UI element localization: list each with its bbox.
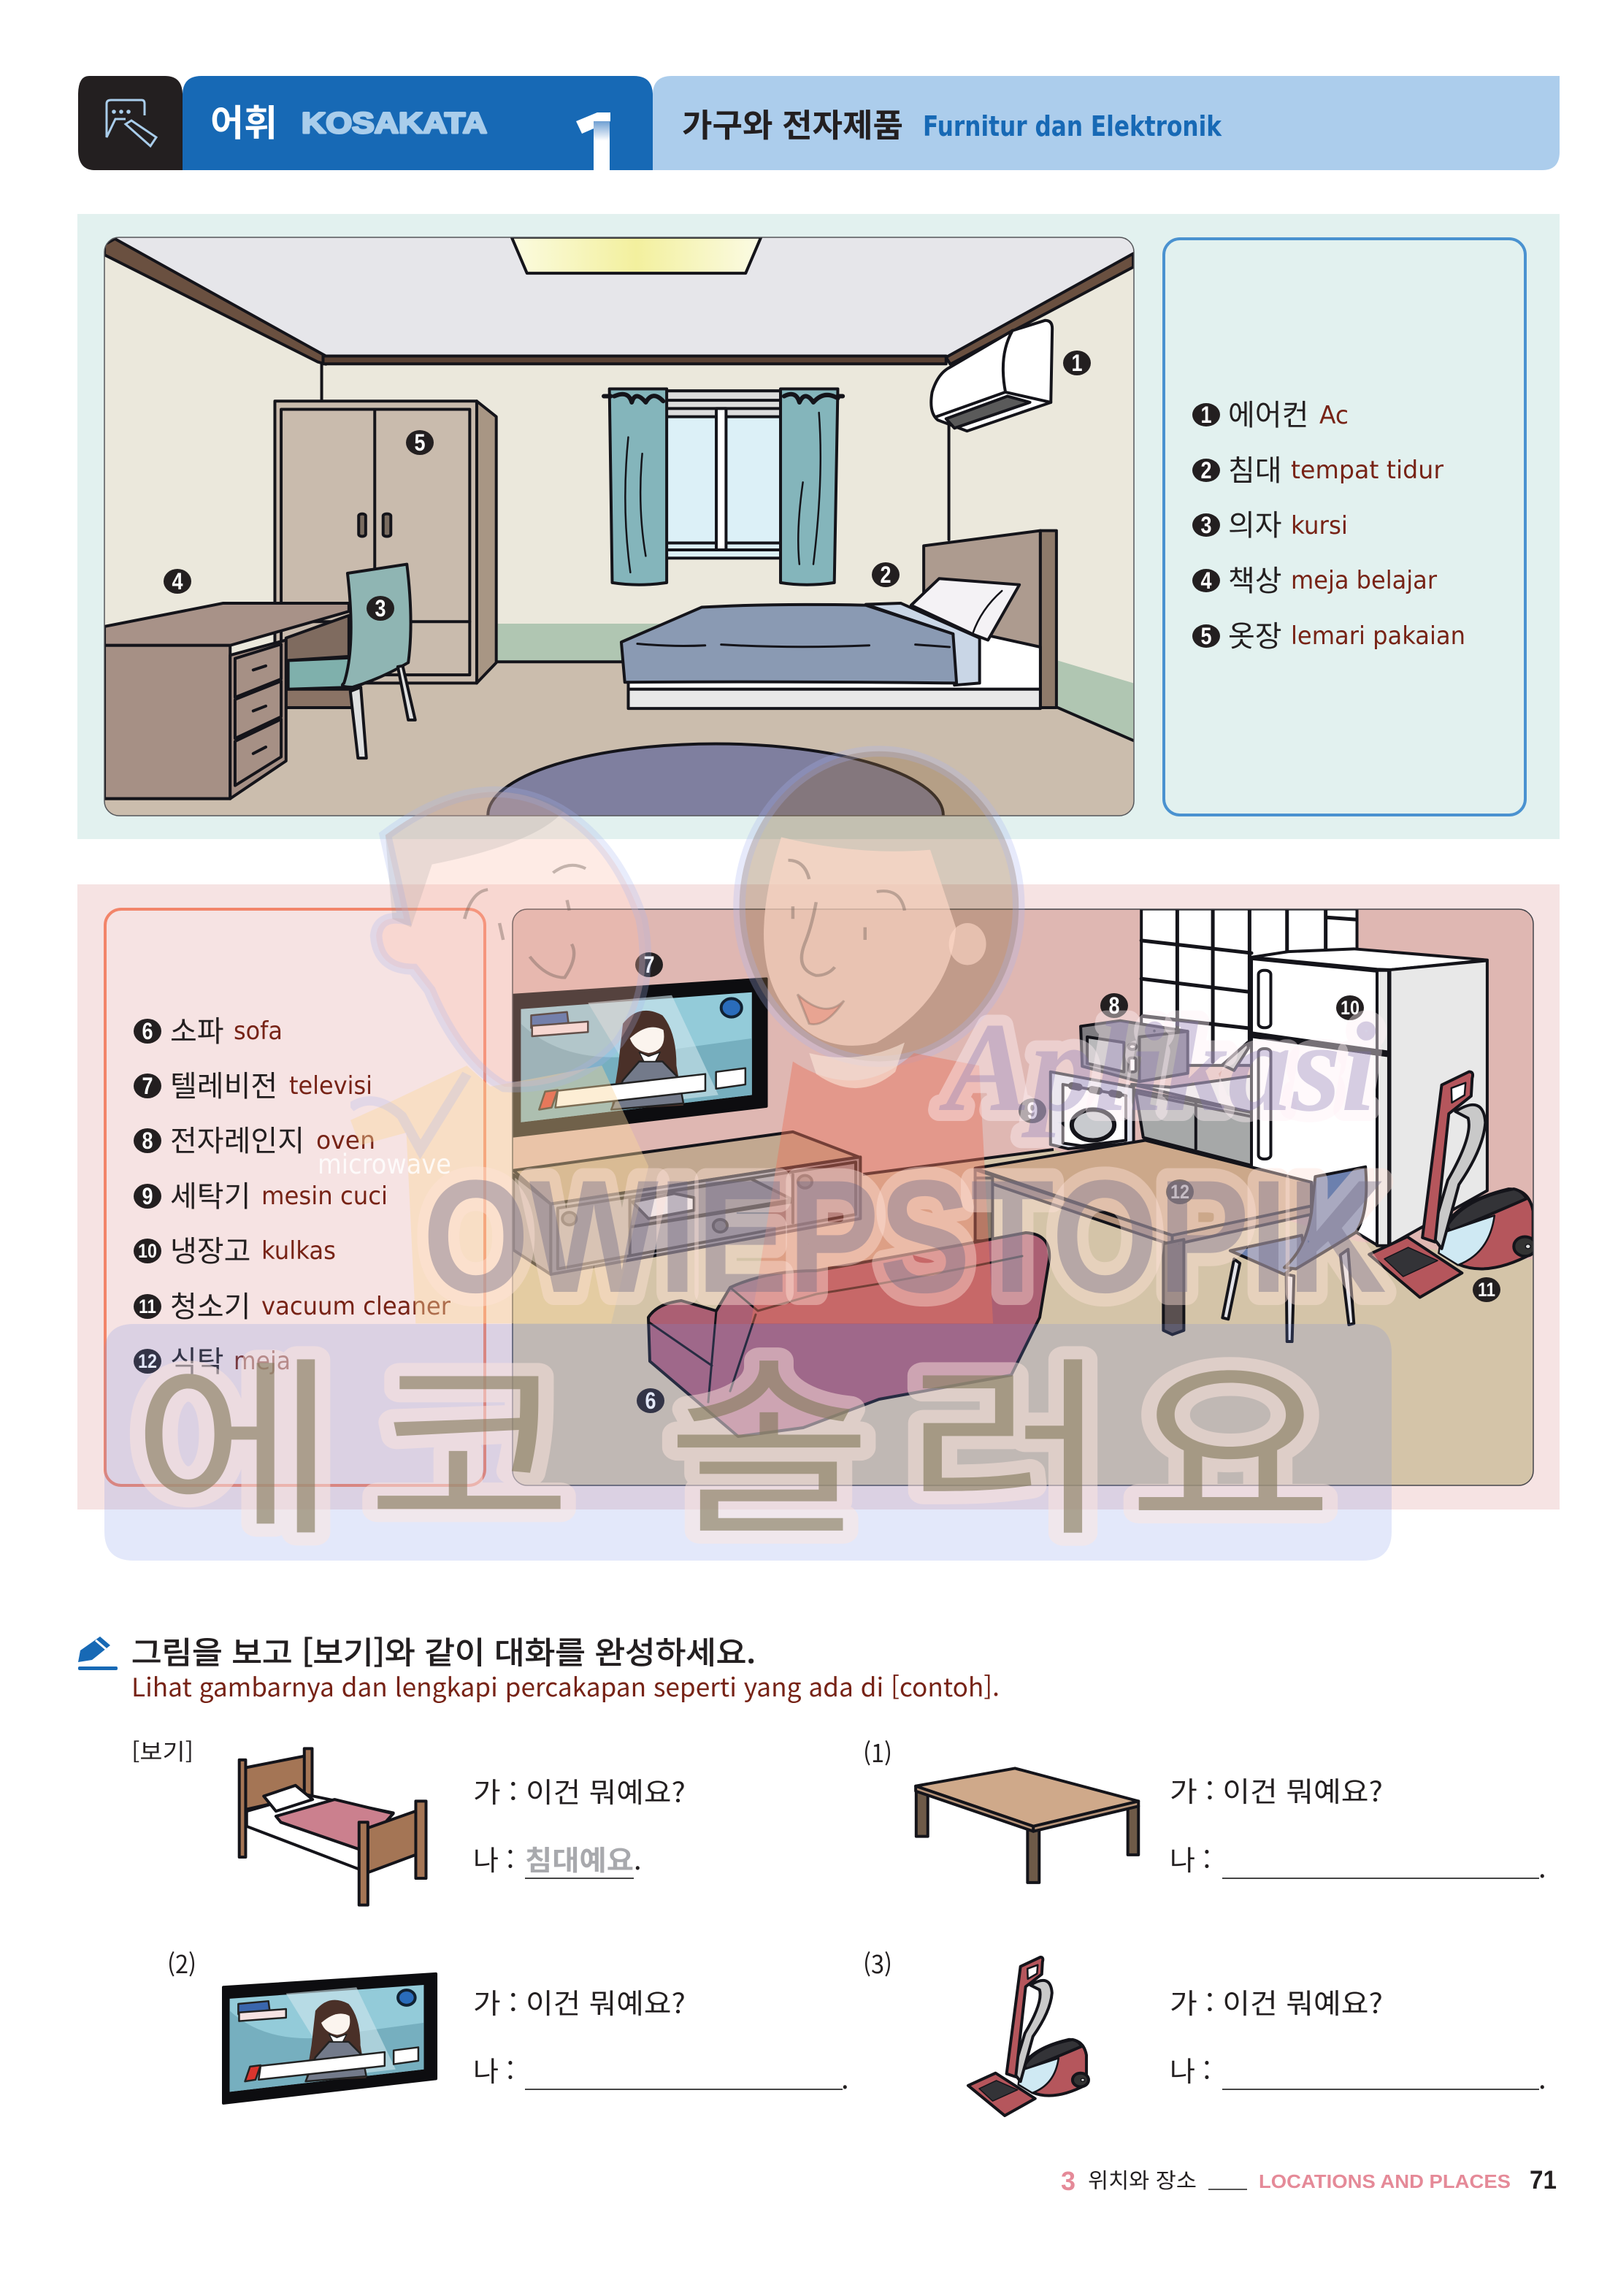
legend box: bedroom vocabulary: 옷장: [1228, 613, 1282, 655]
example: bed: [131, 1734, 686, 1905]
legend box: bedroom vocabulary: tempat tidur: [1291, 456, 1443, 485]
legend box: bedroom vocabulary: meja belajar: [1291, 566, 1437, 595]
exercise 3: vacuum cleaner: 나 :: [1170, 2049, 1211, 2089]
rug: [486, 742, 945, 815]
legend box: living room vocabulary: 8: [142, 1128, 153, 1154]
watermark: blue band: [104, 1324, 1392, 1561]
legend box: bedroom vocabulary: [1164, 239, 1525, 815]
bedroom number markers: 5: [415, 429, 425, 456]
legend box: living room vocabulary: 소파: [170, 1008, 224, 1050]
exercise 3: vacuum cleaner: 가 : 이건 뭐예요?: [1170, 1981, 1383, 2021]
example: bed: .: [634, 1838, 642, 1878]
page footer: LOCATIONS AND PLACES: [1259, 2170, 1511, 2192]
legend box: living room vocabulary: 7: [142, 1073, 153, 1099]
legend box: living room vocabulary: 청소기: [170, 1283, 250, 1325]
illustration: living room scene: [513, 909, 1536, 1485]
watermark: Aplikasi: Aplikasi: [938, 996, 1376, 1138]
watermark: cartoon couple: [350, 751, 1019, 1323]
legend box: living room vocabulary: 12: [138, 1350, 157, 1372]
exercise 2: television: (2): [167, 1945, 196, 1981]
illustration: bedroom scene: [105, 238, 1133, 815]
watermark: microwave: microwave: [318, 1149, 451, 1180]
TV stand: [513, 1132, 860, 1274]
legend box: living room vocabulary: [105, 909, 485, 1485]
legend box: bedroom vocabulary: 책상: [1228, 557, 1282, 600]
legend box: bedroom vocabulary: 에어컨: [1228, 391, 1308, 434]
illustration: table: [916, 1768, 1138, 1883]
bedroom number markers: 2: [881, 562, 891, 588]
window: [665, 391, 781, 558]
section tab: KOSAKATA 1: 어휘: [210, 94, 277, 147]
legend box: living room vocabulary: 전자레인지: [170, 1117, 304, 1160]
legend box: living room vocabulary: kulkas: [261, 1236, 336, 1266]
title tab: Furnitur dan Elektronik: [923, 110, 1222, 142]
living room number markers: 6: [645, 1388, 656, 1414]
illustration: bed: [239, 1748, 426, 1905]
legend box: bedroom vocabulary: 1: [1200, 402, 1212, 428]
dining table: [975, 1140, 1311, 1236]
page footer: 3: [1061, 2166, 1075, 2196]
vacuum cleaner: [1369, 1072, 1536, 1298]
living room number markers: 8: [1108, 992, 1120, 1019]
room outline: [104, 237, 1134, 816]
legend box: living room vocabulary: 9: [142, 1183, 153, 1209]
page footer: 71: [1530, 2166, 1557, 2194]
exercise 2: television: 가 : 이건 뭐예요?: [473, 1981, 686, 2021]
bed: [922, 529, 1041, 646]
legend box: living room vocabulary: 6: [142, 1018, 153, 1044]
legend box: living room vocabulary: 냉장고: [170, 1228, 250, 1270]
legend box: living room vocabulary: mesin cuci: [261, 1182, 388, 1211]
page footer: [1061, 2164, 1557, 2196]
legend box: living room vocabulary: vacuum cleaner: [261, 1292, 450, 1321]
illustration: vacuum cleaner: [968, 1957, 1089, 2116]
legend box: living room vocabulary: 11: [139, 1296, 156, 1317]
watermark overlay: [104, 751, 1392, 1573]
legend box: living room vocabulary: 텔레비전: [170, 1063, 277, 1105]
bedroom number markers: 3: [375, 595, 386, 621]
exercise heading: [78, 1629, 1000, 1704]
section tab: KOSAKATA 1: [183, 76, 653, 170]
exercise 2: television: .: [841, 2057, 849, 2097]
legend box: bedroom vocabulary: Ac: [1319, 401, 1349, 430]
exercise 2: television: [167, 1945, 849, 2103]
woman: [740, 751, 1019, 1061]
exercise heading: Lihat gambarnya dan lengkapi percakapan seperti yang ada di [contoh].: [131, 1667, 1000, 1704]
exercise 1: table: .: [1538, 1846, 1546, 1886]
legend box: bedroom vocabulary: 5: [1200, 623, 1212, 649]
exercise 1: table: [863, 1734, 1546, 1886]
legend box: living room vocabulary: 식탁: [170, 1338, 224, 1380]
living room number markers: [635, 952, 1500, 1414]
chair: [288, 658, 353, 689]
exercise 2: television: 나 :: [473, 2049, 514, 2089]
title tab: 가구와 전자제품: [682, 99, 903, 146]
exercise 3: vacuum cleaner: .: [1538, 2057, 1546, 2097]
exercise heading: 그림을 보고 [보기]와 같이 대화를 완성하세요.: [131, 1629, 756, 1673]
living room number markers: 7: [644, 952, 654, 978]
page footer: 위치와 장소: [1088, 2164, 1197, 2194]
legend box: bedroom vocabulary: 2: [1200, 457, 1212, 483]
legend box: bedroom vocabulary: 침대: [1228, 447, 1282, 489]
panel: bedroom: [77, 214, 1560, 887]
exercise 1: table: (1): [863, 1734, 892, 1769]
example: bed: 가 : 이건 뭐예요?: [473, 1770, 686, 1810]
legend box: bedroom vocabulary: lemari pakaian: [1291, 621, 1465, 651]
legend box: living room vocabulary: meja: [234, 1347, 291, 1376]
dining chair: [1230, 1236, 1305, 1274]
section tab: KOSAKATA 1: KOSAKATA: [302, 107, 487, 139]
man: [350, 1065, 648, 1323]
living room number markers: 12: [1170, 1181, 1189, 1203]
sofa: [648, 1233, 1049, 1436]
living room number markers: 10: [1341, 997, 1360, 1019]
desk: [286, 616, 349, 661]
illustration: television: [223, 1974, 436, 2103]
watermark: Korean title: 에코솔러요: [131, 1296, 1333, 1573]
header bar: [78, 76, 1560, 170]
bedroom number markers: [164, 350, 1091, 621]
legend box: living room vocabulary: televisi: [289, 1071, 372, 1101]
living room number markers: 9: [1027, 1098, 1038, 1124]
wardrobe: [477, 401, 496, 683]
icon tab: chat with pencil: [78, 76, 183, 170]
exercise 1: table: 나 :: [1170, 1838, 1211, 1878]
example: bed: [보기]: [131, 1734, 193, 1767]
legend box: bedroom vocabulary: 의자: [1228, 502, 1282, 544]
legend box: bedroom vocabulary: 4: [1200, 567, 1212, 594]
example: bed: 나 :: [473, 1838, 514, 1878]
legend box: living room vocabulary: 10: [138, 1240, 157, 1262]
bedroom number markers: 1: [1072, 350, 1082, 376]
legend box: bedroom vocabulary: 3: [1200, 512, 1212, 538]
icon: pencil: [78, 1637, 118, 1670]
legend box: bedroom vocabulary: kursi: [1291, 511, 1348, 540]
exercise 3: vacuum cleaner: (3): [863, 1945, 892, 1981]
television: [513, 979, 767, 1136]
kitchen, fridge, table, chair: [975, 909, 1487, 1342]
legend box: living room vocabulary: 세탁기: [170, 1173, 250, 1215]
exercise 3: vacuum cleaner: [863, 1945, 1546, 2116]
legend box: living room vocabulary: sofa: [234, 1017, 283, 1046]
exercise 1: table: 가 : 이건 뭐예요?: [1170, 1769, 1383, 1810]
living room number markers: 11: [1478, 1279, 1495, 1301]
legend box: living room vocabulary: oven: [316, 1126, 375, 1155]
watermark: OWIEPSTOPIK: OWIEPSTOPIK: [423, 1147, 1387, 1326]
bedroom number markers: 4: [172, 568, 183, 594]
title tab: [653, 76, 1560, 170]
air conditioner: [931, 321, 1052, 431]
example: bed: 침대예요: [525, 1838, 634, 1878]
panel: living room: [77, 884, 1560, 1509]
